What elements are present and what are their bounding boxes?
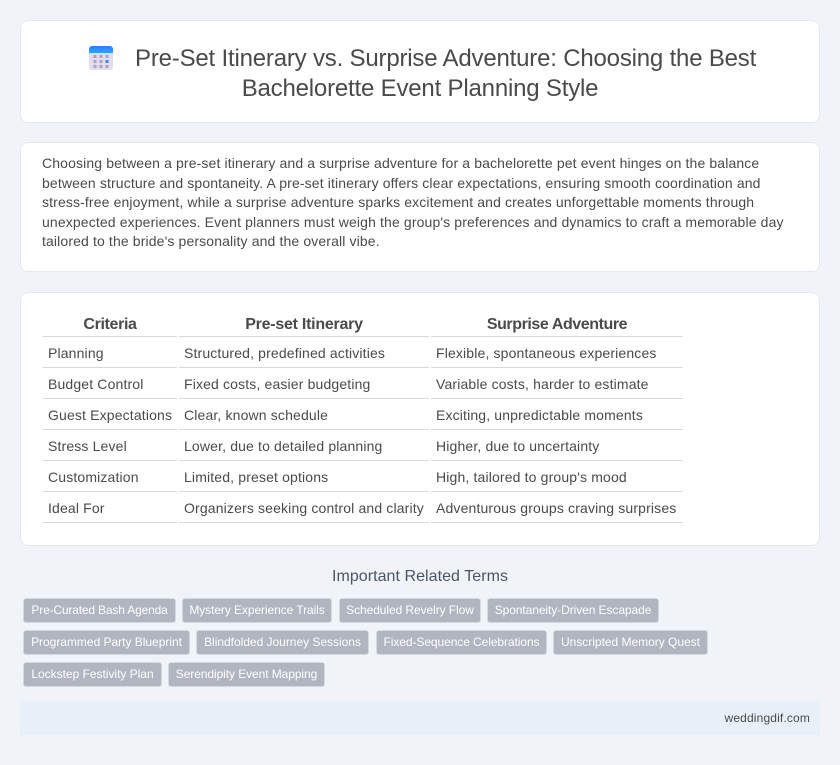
row: budget control <box>48 376 649 392</box>
row: budget control: Fixed costs, easier budgeting <box>184 376 370 392</box>
intro paragraph: unexpected experiences. Event planners must weigh the group's preferences and dynamics to craft a memorable day <box>42 214 784 230</box>
related terms tags: Fixed-Sequence Celebrations <box>384 635 539 649</box>
footer bar <box>20 701 820 735</box>
row: planning: Planning <box>48 345 104 361</box>
row: customization <box>48 469 627 485</box>
row: stress level <box>48 438 600 454</box>
row: planning: Flexible, spontaneous experiences <box>436 345 657 361</box>
row: customization: Limited, preset options <box>184 469 328 485</box>
row: ideal for: Adventurous groups craving surprises <box>436 500 676 516</box>
related terms tags: Scheduled Revelry Flow <box>346 603 474 617</box>
column headers: Criteria <box>83 316 137 333</box>
row: guest expectations: Guest Expectations <box>48 407 172 423</box>
intro paragraph <box>42 155 784 249</box>
related terms tags <box>23 598 708 687</box>
intro text panel <box>20 142 820 272</box>
row: ideal for <box>48 500 676 516</box>
column headers: Pre-set Itinerary <box>245 316 363 333</box>
title: Pre-Set Itinerary vs. Surprise Adventure: Choosing the Best <box>135 45 756 72</box>
icon: calendar <box>89 46 113 70</box>
header panel <box>20 20 820 123</box>
related terms tags: Blindfolded Journey Sessions <box>204 635 361 649</box>
row: budget control: Variable costs, harder to estimate <box>436 376 649 392</box>
related terms tags: Serendipity Event Mapping <box>176 667 317 681</box>
related terms tags: Spontaneity-Driven Escapade <box>495 603 651 617</box>
row: stress level: Lower, due to detailed planning <box>184 438 382 454</box>
related terms tags: Programmed Party Blueprint <box>31 635 182 649</box>
row: guest expectations: Exciting, unpredictable moments <box>436 407 643 423</box>
row: customization: Customization <box>48 469 139 485</box>
row: guest expectations <box>48 407 643 423</box>
comparison table panel <box>20 292 820 546</box>
related terms tags: Unscripted Memory Quest <box>561 635 700 649</box>
related terms tags: Pre-Curated Bash Agenda <box>31 603 168 617</box>
row: ideal for: Ideal For <box>48 500 105 516</box>
title <box>135 45 756 102</box>
related terms tags: Lockstep Festivity Plan <box>31 667 154 681</box>
related terms heading: Important Related Terms <box>332 568 508 585</box>
intro paragraph: between structure and spontaneity. A pre-set itinerary offers clear expectations, ensuring smooth coordination and <box>42 175 761 191</box>
comparison table <box>43 316 683 523</box>
row: budget control: Budget Control <box>48 376 144 392</box>
footer source text: weddingdif.com <box>725 711 810 725</box>
intro paragraph: tailored to the bride's personality and the overall vibe. <box>42 233 380 249</box>
intro paragraph: stress-free enjoyment, while a surprise adventure sparks excitement and creates unforgettable moments through <box>42 194 754 210</box>
row: stress level: Higher, due to uncertainty <box>436 438 599 454</box>
intro paragraph: Choosing between a pre-set itinerary and a surprise adventure for a bachelorette pet event hinges on the balance <box>42 155 759 171</box>
title: Bachelorette Event Planning Style <box>242 75 598 102</box>
column headers: Surprise Adventure <box>487 316 627 333</box>
column headers <box>83 316 627 333</box>
row: guest expectations: Clear, known schedule <box>184 407 328 423</box>
row: planning <box>48 345 657 361</box>
related terms tags: Mystery Experience Trails <box>189 603 325 617</box>
row: stress level: Stress Level <box>48 438 127 454</box>
row: planning: Structured, predefined activities <box>184 345 385 361</box>
row: customization: High, tailored to group's mood <box>436 469 627 485</box>
row: ideal for: Organizers seeking control and clarity <box>184 500 424 516</box>
